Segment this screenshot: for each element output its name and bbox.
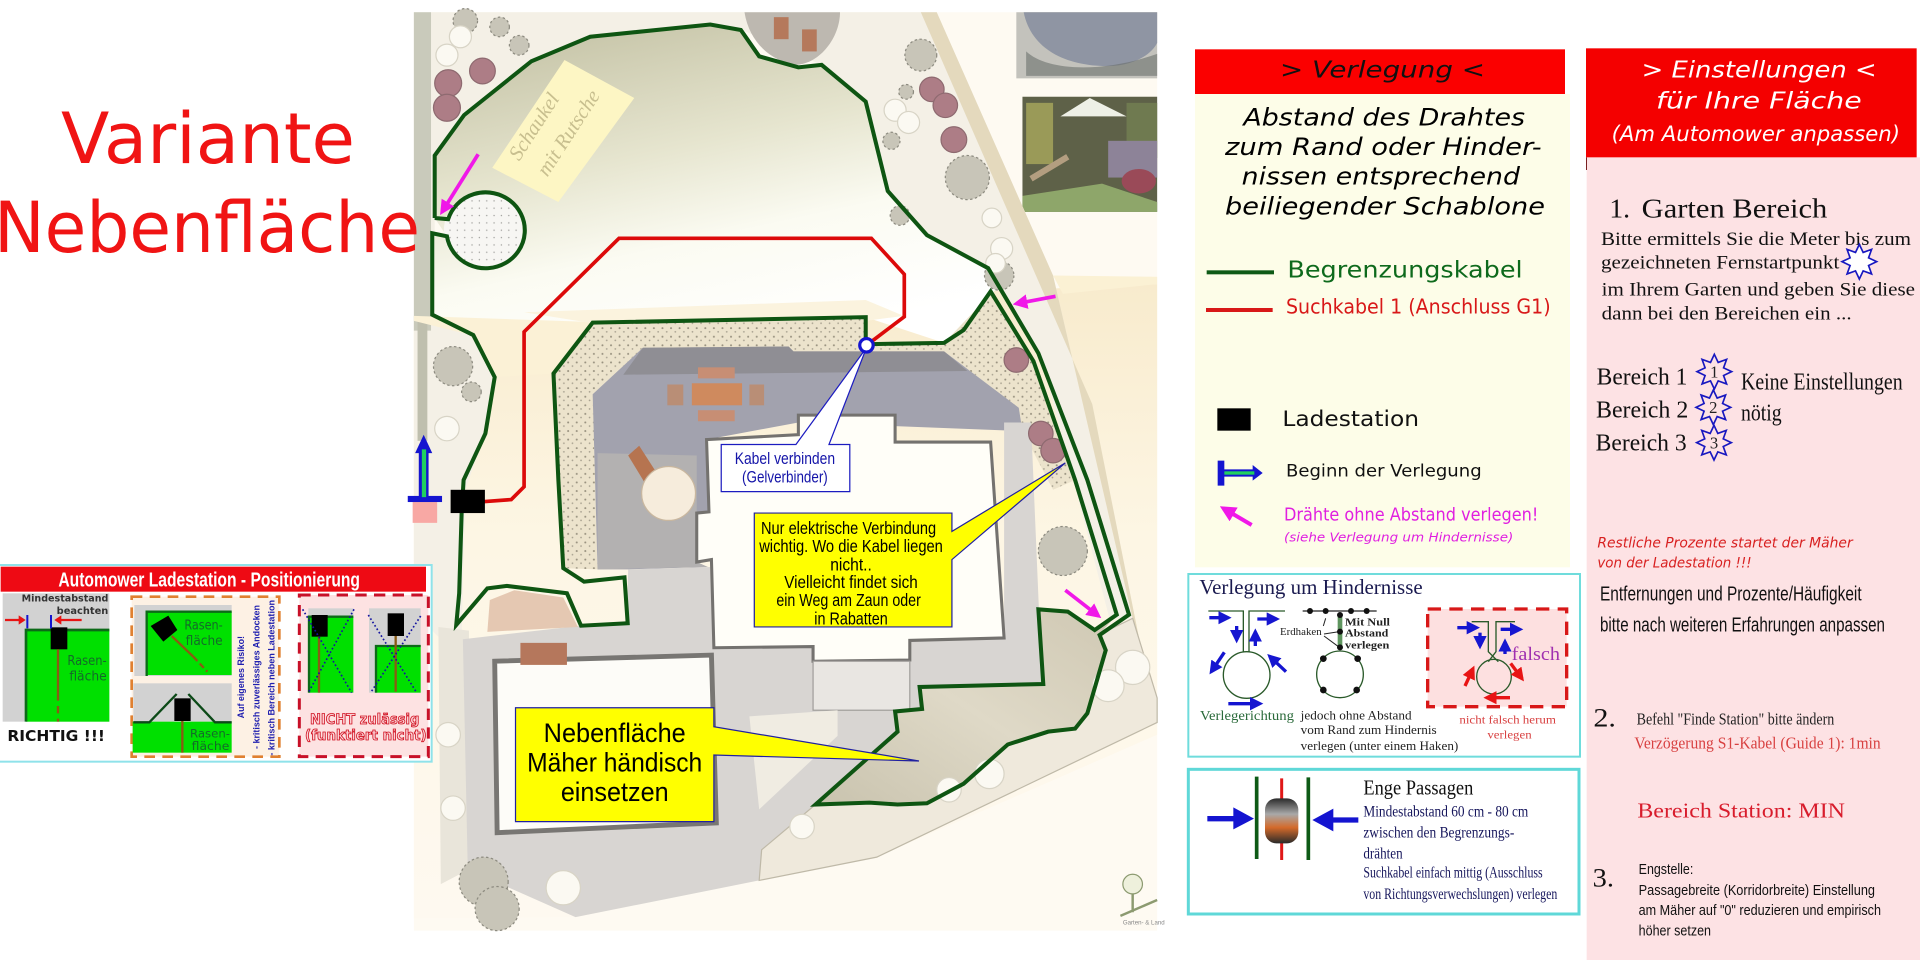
arrow: no-gap marker at fence bbox=[1016, 296, 1056, 304]
section 1: Garten Bereich: im Ihrem Garten und geben Sie diese bbox=[1602, 280, 1915, 301]
text: Abstand des Drahtes: beiliegender Schablone bbox=[1225, 192, 1545, 220]
diagram: mower in passage bbox=[1207, 777, 1358, 860]
panel: Verlegung um Hindernisse bbox=[1188, 574, 1580, 757]
diagram: correct position: fläche bbox=[69, 670, 107, 685]
list: Bereich 1 to 3: 1 bbox=[1710, 362, 1718, 381]
callout: Nur elektrische Verbindung: ein Weg am Zaun oder bbox=[776, 590, 921, 610]
section 3: Engstelle: am Mäher auf "0" reduzieren und empirisch bbox=[1639, 903, 1881, 919]
section 3: Engstelle: Passagebreite (Korridorbreite) Einstellung bbox=[1639, 883, 1875, 899]
note: Restliche Prozente bbox=[1597, 536, 1854, 571]
diagram: correct position: Mindestabstand bbox=[22, 594, 108, 605]
legend: Drähte ohne Abstand: Drähte ohne Abstand verlegen! bbox=[1284, 505, 1538, 526]
diagram: earth hooks: jedoch ohne Abstand bbox=[1300, 708, 1412, 722]
garden beds and fence strip bbox=[414, 12, 1157, 884]
bed with planting triangle bbox=[749, 710, 838, 809]
arrow: no-gap marker at pond bbox=[442, 154, 478, 212]
logo bbox=[1120, 874, 1165, 926]
list: Bereich 1 to 3: 2 bbox=[1709, 398, 1717, 417]
lawn lower area bbox=[816, 609, 1117, 804]
diagram: earth hooks: Mit Null bbox=[1345, 617, 1390, 628]
section 3: Engstelle: Engstelle: bbox=[1639, 862, 1693, 878]
garden furniture bbox=[628, 367, 764, 520]
heading: Einstellungen bbox=[1586, 48, 1917, 170]
panel: Enge Passagen bbox=[1188, 769, 1579, 914]
terrace bed bbox=[553, 294, 1075, 569]
text: Enge Passagen: Enge Passagen bbox=[1363, 777, 1474, 799]
guide wire bbox=[483, 238, 904, 502]
section 2: Befehl Finde Station bbox=[1593, 704, 1881, 822]
title: Nebenfläche bbox=[0, 187, 420, 269]
legend: Ladestation bbox=[1217, 407, 1419, 432]
sticky note: Schaukel bbox=[503, 88, 564, 164]
diagram: correct direction: Verlegerichtung bbox=[1200, 709, 1294, 724]
callout: Nur elektrische Verbindung: nicht.. bbox=[830, 555, 872, 575]
title: Variante bbox=[61, 98, 355, 180]
text: Entfernungen und Prozente bbox=[1600, 583, 1885, 637]
text: Keine Einstellungen nötig: nötig bbox=[1741, 401, 1782, 427]
list: Bereich 1 to 3: Bereich 2 bbox=[1596, 397, 1688, 423]
list: Bereich 1 to 3: Bereich 1 bbox=[1597, 364, 1687, 390]
callout: Kabel verbinden: Kabel verbinden bbox=[735, 449, 835, 468]
diagram: correct direction bbox=[1200, 611, 1294, 724]
diagram: earth hooks: verlegen bbox=[1345, 640, 1390, 651]
diagram: correct position bbox=[3, 593, 109, 745]
panel: Verlegung bbox=[1195, 49, 1570, 567]
callout: Nur elektrische Verbindung: wichtig. Wo die Kabel liegen bbox=[758, 536, 943, 556]
icon: start of laying bbox=[408, 435, 442, 502]
legend: Suchkabel: Suchkabel 1 (Anschluss G1) bbox=[1286, 294, 1551, 318]
section 1: Garten Bereich: dann bei den Bereichen ein ... bbox=[1602, 303, 1852, 324]
sticky note bbox=[492, 60, 634, 202]
legend: Ladestation: Ladestation bbox=[1282, 407, 1419, 432]
section 1: Garten Bereich: 1. bbox=[1609, 194, 1630, 224]
small paving grid bbox=[813, 661, 910, 710]
bed along southern boundary bbox=[759, 618, 1157, 880]
callout: Nebenfläche Mäher händisch einsetzen: Nebenfläche bbox=[544, 718, 686, 748]
panel: Einstellungen lower text bbox=[1593, 536, 1885, 940]
section 2: Befehl Finde Station: Verzögerung S1-Kabel (Guide 1): 1min bbox=[1634, 733, 1881, 752]
diagram: at own risk bbox=[132, 597, 279, 757]
note: Restliche Prozente: von der Ladestation !!! bbox=[1597, 555, 1752, 571]
callout: Nur elektrische Verbindung: in Rabatten bbox=[814, 608, 888, 628]
callout: Nebenfläche Mäher händisch einsetzen bbox=[516, 708, 919, 822]
terrace bbox=[593, 347, 1022, 569]
text: Abstand des Drahtes bbox=[1224, 104, 1545, 220]
legend: Beginn der Verlegung bbox=[1218, 461, 1482, 486]
diagram: not allowed: (funktiert nicht) bbox=[305, 728, 427, 744]
plants: pale circles bbox=[435, 26, 1150, 905]
text: Enge Passagen: drähten bbox=[1363, 845, 1403, 862]
plants: grey shrubs bbox=[433, 9, 1087, 931]
diagram: correct position: beachten bbox=[57, 606, 108, 617]
diagram: not allowed bbox=[299, 595, 428, 757]
gazebo seating circle bbox=[744, 12, 840, 65]
title bbox=[0, 98, 420, 269]
note: Restliche Prozente: Restliche Prozente startet der Mäher bbox=[1597, 536, 1854, 552]
diagram: correct position: RICHTIG !!! bbox=[7, 728, 105, 745]
icon: charging station bbox=[451, 490, 485, 513]
diagram: earth hooks bbox=[1280, 608, 1458, 753]
section 3: Engstelle bbox=[1593, 862, 1881, 940]
plants: red shrubs bbox=[433, 58, 1065, 463]
arrow: no-gap marker at lower lawn bbox=[1065, 590, 1098, 616]
boundary wire bbox=[432, 24, 1129, 804]
lawn upper area bbox=[432, 24, 994, 373]
list: Bereich 1 to 3 bbox=[1596, 354, 1732, 460]
text: Abstand des Drahtes: zum Rand oder Hinder- bbox=[1224, 133, 1542, 161]
panel: Automower Ladestation Positionierung bbox=[0, 565, 432, 762]
diagram: not allowed: NICHT zulässig bbox=[310, 712, 419, 728]
diagram: wrong direction: falsch bbox=[1512, 644, 1560, 665]
second building bbox=[495, 655, 716, 833]
panel heading: Automower Ladestation - Positionierung bbox=[58, 570, 360, 592]
diagram: earth hooks: vom Rand zum Hindernis bbox=[1301, 723, 1437, 737]
text: Enge Passagen: Mindestabstand 60 cm - 80 cm bbox=[1363, 804, 1528, 821]
text: Abstand des Drahtes: Abstand des Drahtes bbox=[1241, 104, 1525, 132]
callout: Nur elektrische Verbindung bbox=[754, 463, 1065, 628]
diagram: at own risk: - kritisch Bereich neben Ladestation bbox=[267, 600, 277, 756]
legend: Drähte ohne Abstand bbox=[1223, 505, 1538, 545]
diagram: correct position: Rasen- bbox=[67, 654, 107, 669]
diagram: at own risk: Auf eigenes Risiko! bbox=[236, 636, 246, 718]
sticky note: mit Rutsche bbox=[531, 85, 605, 180]
legend: Begrenzungskabel: Begrenzungskabel bbox=[1287, 256, 1523, 284]
heading: Einstellungen: für Ihre Fläche bbox=[1656, 86, 1862, 114]
text: Enge Passagen: zwischen den Begrenzungs- bbox=[1363, 824, 1514, 841]
section 1: Garten Bereich bbox=[1601, 194, 1915, 324]
panel: garden plan bbox=[408, 9, 1165, 931]
text: Enge Passagen bbox=[1363, 777, 1558, 903]
text: Abstand des Drahtes: nissen entsprechend bbox=[1242, 162, 1521, 190]
section 1: Garten Bereich: Bitte ermittels Sie die Meter bis zum bbox=[1601, 229, 1912, 250]
diagram: at own risk: fläche bbox=[192, 739, 229, 753]
diagram: at own risk: Rasen- bbox=[190, 726, 230, 740]
logo: Garten- & Land bbox=[1123, 919, 1165, 926]
legend: Beginn der Verlegung: Beginn der Verlegung bbox=[1286, 462, 1482, 481]
section 1: Garten Bereich: gezeichneten Fernstartpunkt bbox=[1601, 252, 1840, 273]
diagram: wrong direction bbox=[1428, 609, 1567, 707]
text: Enge Passagen: Suchkabel einfach mittig (Ausschluss bbox=[1363, 864, 1543, 881]
text: Keine Einstellungen nötig bbox=[1741, 369, 1903, 427]
section 2: Befehl Finde Station: 2. bbox=[1593, 704, 1616, 733]
heading: Verlegung: > Verlegung < bbox=[1280, 56, 1485, 84]
icon: remote start point star bbox=[1842, 244, 1877, 279]
caption: nicht falsch herum verlegen: nicht falsch herum bbox=[1459, 712, 1557, 726]
caption: nicht falsch herum verlegen bbox=[1459, 712, 1557, 741]
panel: Einstellungen bbox=[1586, 48, 1920, 960]
photo: garden with parasol bbox=[1022, 97, 1157, 212]
caption: nicht falsch herum verlegen: verlegen bbox=[1487, 727, 1532, 741]
callout: Nebenfläche Mäher händisch einsetzen: Mäher händisch bbox=[527, 747, 702, 777]
patio seat area bbox=[487, 590, 578, 632]
section 2: Befehl Finde Station: Befehl "Finde Station" bitte ändern bbox=[1637, 709, 1835, 728]
text: Enge Passagen: von Richtungsverwechslungen) verlegen bbox=[1363, 886, 1558, 903]
list: Bereich 1 to 3: Bereich 3 bbox=[1596, 431, 1687, 457]
house bbox=[697, 415, 1004, 661]
diagram: at own risk: Rasen- bbox=[184, 618, 223, 633]
diagram: at own risk: - kritisch zuverlässiges Andocken bbox=[252, 605, 262, 749]
section 3: Engstelle: 3. bbox=[1593, 864, 1614, 893]
list: Bereich 1 to 3: 3 bbox=[1710, 433, 1718, 452]
section 1: Garten Bereich: Garten Bereich bbox=[1642, 194, 1828, 224]
heading: Einstellungen: > Einstellungen < bbox=[1642, 55, 1877, 83]
icon: cable connector ring bbox=[860, 339, 873, 352]
diagram: earth hooks: Abstand bbox=[1345, 629, 1389, 640]
heading: Verlegung bbox=[1195, 49, 1565, 94]
diagram: at own risk: fläche bbox=[186, 634, 223, 649]
photo: pond bbox=[1016, 12, 1157, 78]
charging-station ground marker bbox=[413, 502, 437, 523]
callout: Kabel verbinden: (Gelverbinder) bbox=[742, 467, 828, 486]
legend: Begrenzungskabel bbox=[1207, 256, 1523, 284]
callout: Kabel verbinden bbox=[721, 348, 866, 492]
section 2: Befehl Finde Station: Bereich Station: MIN bbox=[1637, 800, 1845, 822]
callout: Nebenfläche Mäher händisch einsetzen: einsetzen bbox=[561, 777, 669, 807]
callout: Nur elektrische Verbindung: Nur elektrische Verbindung bbox=[761, 518, 936, 538]
heading: Verlegung um Hindernisse bbox=[1199, 577, 1423, 599]
callout: Nur elektrische Verbindung: Vielleicht findet sich bbox=[784, 572, 918, 592]
pond gravel circle bbox=[444, 192, 522, 268]
section 3: Engstelle: höher setzen bbox=[1639, 924, 1711, 940]
paved walkway bbox=[463, 422, 1042, 917]
heading: Einstellungen: (Am Automower anpassen) bbox=[1612, 122, 1900, 147]
diagram: earth hooks: verlegen (unter einem Haken) bbox=[1301, 739, 1458, 753]
legend: Drähte ohne Abstand: (siehe Verlegung um Hindernisse) bbox=[1284, 530, 1513, 545]
diagram: earth hooks: Erdhaken bbox=[1280, 627, 1322, 638]
